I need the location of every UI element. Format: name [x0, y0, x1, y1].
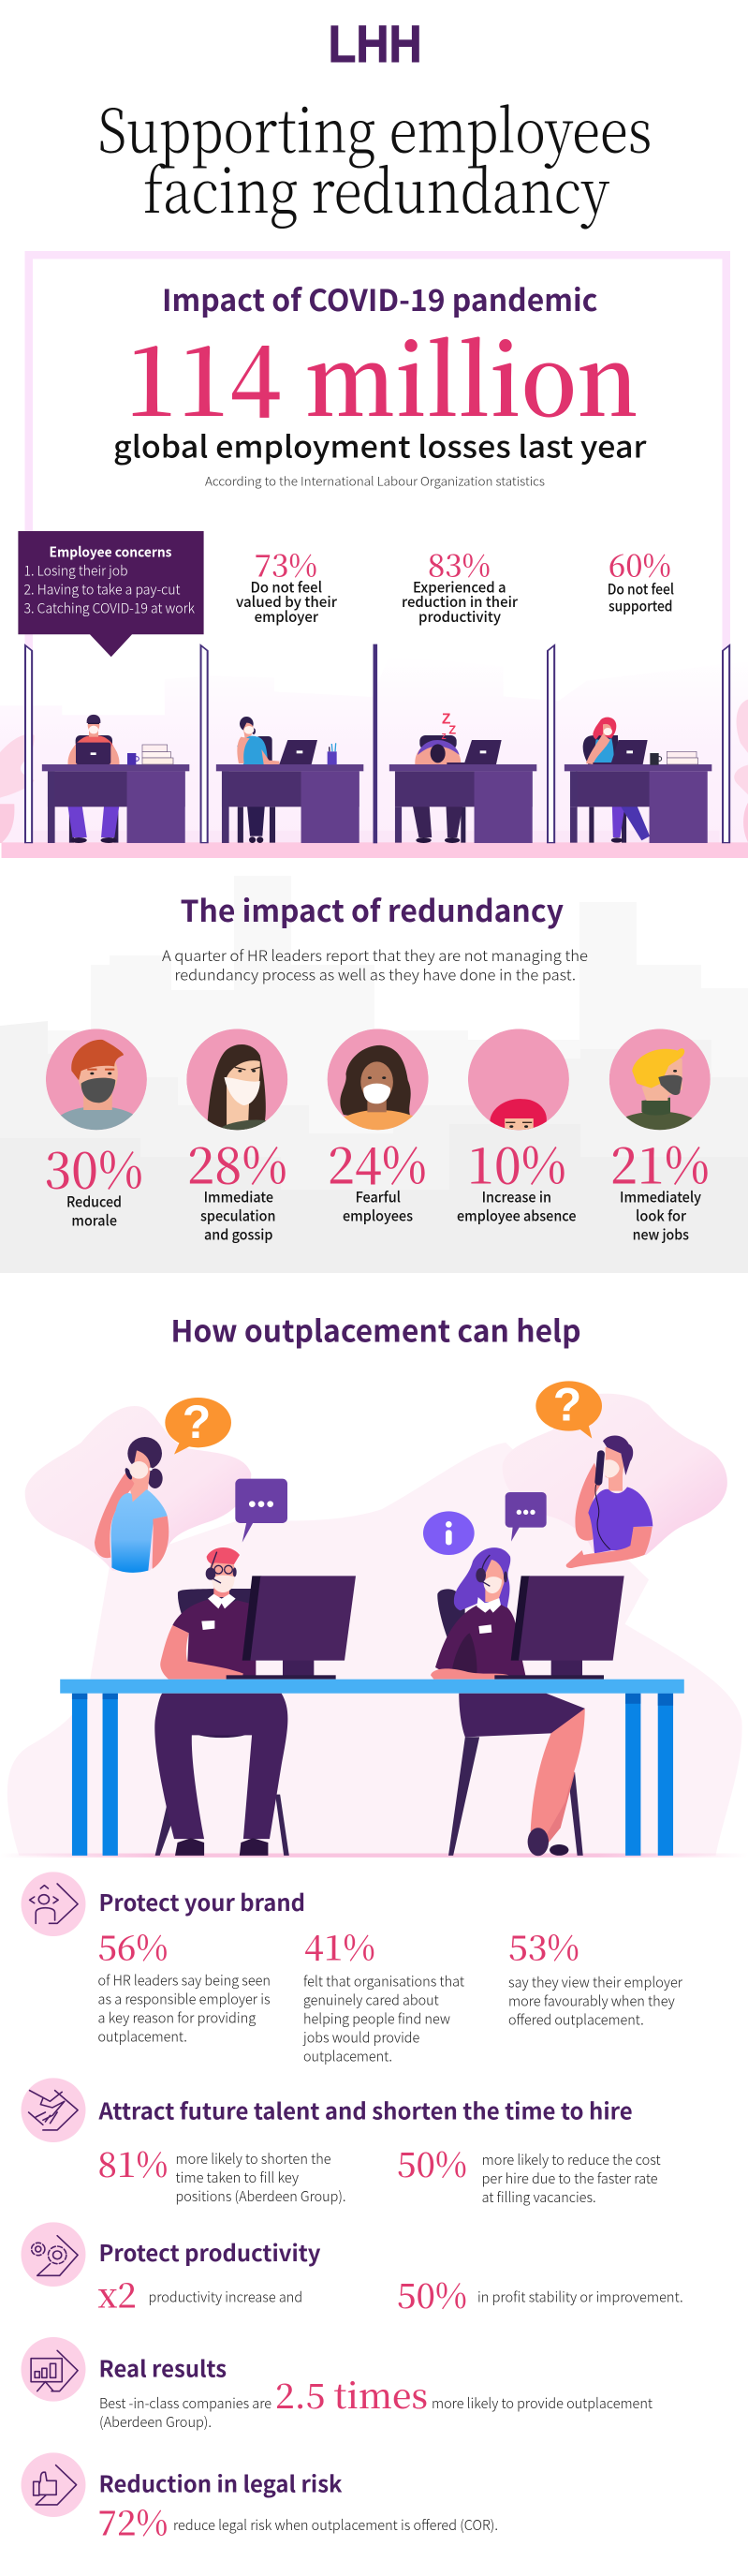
- stat: 41%: helping people find new: [303, 2008, 450, 2028]
- stat: 41%: genuinely cared about: [303, 1990, 439, 2009]
- monitor 2: [494, 1576, 624, 1680]
- stat: 10% absence: 10%: [467, 1126, 566, 1198]
- stat: 50%: at filling vacancies.: [482, 2187, 596, 2207]
- stat: 21% new jobs: 21%: [610, 1126, 710, 1198]
- source note: According to the International Labour Organization statistics: [205, 472, 545, 490]
- background: grey skyline: [0, 876, 748, 1273]
- desk 2: [216, 764, 363, 843]
- sentence with 2.5 times: more likely to provide outplacement: [432, 2393, 653, 2413]
- stat: 30% reduced morale: morale: [71, 1209, 117, 1230]
- icon: thumbs up: [21, 2452, 86, 2517]
- stat: 41%: outplacement.: [303, 2047, 392, 2066]
- stat: x2: x2: [97, 2267, 137, 2317]
- caller 2 blob: [503, 1394, 727, 1555]
- stat: 41%: felt that organisations that: [303, 1971, 465, 1991]
- stat: 83%: 83%: [428, 542, 491, 586]
- agent 2 legs and chair: [448, 1694, 585, 1856]
- callout: employee concerns: 1. Losing their job: [24, 561, 127, 581]
- bubble: info icon: [423, 1511, 475, 1555]
- person 2: woman resting head on hand: [237, 717, 337, 764]
- desk 4: [565, 764, 711, 843]
- stat: 21% new jobs: look for: [636, 1205, 687, 1225]
- stat: 50% profit: 50%: [397, 2268, 467, 2318]
- title: facing redundancy: [143, 144, 609, 230]
- stat: 50% profit: in profit stability or improvement.: [477, 2287, 683, 2307]
- stat: 28% speculation: [187, 1126, 287, 1244]
- right half: caller and agent: [423, 1379, 727, 1680]
- floor: [2, 842, 748, 858]
- stat: 53%: 53%: [508, 1919, 579, 1970]
- stat: 21% new jobs: [610, 1126, 710, 1244]
- caller 2: man on phone: [566, 1435, 653, 1568]
- stat: 60%: 60%: [609, 542, 671, 586]
- stat: x2: productivity increase and: [148, 2287, 302, 2307]
- stat: 60%: [608, 542, 674, 616]
- heading: The impact of redundancy: [181, 888, 564, 931]
- people at desks, right pair: [415, 711, 698, 765]
- bubble: orange question mark 2: [535, 1379, 602, 1439]
- person 4: woman with red hair: [583, 718, 698, 765]
- people at desks, left pair: [68, 715, 337, 765]
- stat: 30% reduced morale: Reduced: [66, 1191, 122, 1211]
- icon: chart presentation: [21, 2337, 86, 2402]
- block: real results: [21, 2337, 653, 2432]
- stat: 41%: [302, 1919, 465, 2066]
- face 1: red hair, grey mask: [46, 1029, 147, 1132]
- bubble: purple chat 2: [506, 1492, 547, 1542]
- stat: 50%: more likely to reduce the cost: [482, 2150, 661, 2169]
- block: reduction in legal risk: [21, 2452, 498, 2546]
- sentence with 2.5 times: (Aberdeen Group).: [99, 2412, 212, 2432]
- stat: 10% absence: employee absence: [457, 1205, 577, 1225]
- stat: 73%: Do not feel: [251, 576, 322, 597]
- stat: 83%: Experienced a: [413, 576, 506, 597]
- stat: 50%: 50%: [397, 2137, 467, 2187]
- agent 2: woman with headset: [431, 1547, 526, 1680]
- person 3: asleep on the desk: [415, 711, 502, 764]
- illustration: call centre scene: [0, 1379, 748, 1858]
- cubicle panels: [25, 644, 729, 843]
- plant left: [0, 734, 35, 843]
- heading: Real results: [99, 2350, 227, 2383]
- stat: 28% speculation: 28%: [187, 1126, 287, 1198]
- stat: 56%: [97, 1919, 271, 2046]
- face 5: blond hair, grey mask, profile: [609, 1029, 711, 1132]
- stat: 81%: positions (Aberdeen Group).: [176, 2186, 346, 2206]
- block: attract future talent: [21, 2078, 661, 2207]
- bubble: orange question mark 2: ?: [553, 1379, 581, 1431]
- stat: 30% reduced morale: [44, 1131, 143, 1230]
- stat: 41%: 41%: [304, 1919, 375, 1970]
- bubble: purple chat 1: [235, 1479, 287, 1543]
- table: [60, 1680, 684, 1856]
- big number: 114 million: 114 million: [125, 303, 638, 444]
- monitor 1: [227, 1576, 356, 1680]
- left half: caller and agent: [25, 1396, 356, 1680]
- logo: LHH: LHH: [329, 14, 422, 73]
- stat: 60%: supported: [609, 596, 672, 616]
- heading: how outplacement can help: How outplacement can help: [170, 1308, 581, 1351]
- desk 3: [389, 764, 536, 843]
- stat: 73%: valued by their: [236, 591, 338, 612]
- stat: 81%: time taken to fill key: [176, 2168, 300, 2187]
- illustration: office desks scene: [0, 644, 748, 858]
- stat: 10% absence: [457, 1126, 577, 1225]
- icon: handshake: [21, 2078, 86, 2142]
- block: protect productivity: [21, 2222, 683, 2318]
- desk 1: [42, 764, 189, 843]
- stat: 30% reduced morale: 30%: [44, 1131, 143, 1203]
- sentence with 2.5 times: Best -in-class companies are: [99, 2393, 271, 2413]
- stat: 56%: of HR leaders say being seen: [97, 1970, 271, 1990]
- face 2: long dark hair, white mask: [186, 1029, 287, 1132]
- icon: brand person: [21, 1872, 86, 1936]
- person 3: asleep on the desk: Z: [448, 723, 456, 736]
- stat: 83%: [402, 542, 519, 627]
- face 4: peeking person: [468, 1029, 569, 1132]
- stat: 56%: outplacement.: [97, 2026, 187, 2046]
- person 1: masked man with laptop, mug and books: [68, 715, 173, 765]
- caller 1: woman on phone: [95, 1437, 169, 1573]
- callout: employee concerns: [18, 531, 204, 657]
- stat: 81%: [97, 2137, 346, 2206]
- panel: impact frame: [24, 251, 730, 656]
- intro text: A quarter of HR leaders report that they are not managing the: [162, 943, 588, 966]
- stat: 53%: [508, 1919, 683, 2029]
- stat: 72%: 72%: [97, 2495, 169, 2546]
- stat: 72%: [97, 2495, 498, 2546]
- stat: 73%: [236, 542, 338, 627]
- stat: 73%: 73%: [255, 542, 317, 586]
- callout: employee concerns: Employee concerns: [49, 541, 172, 561]
- heading: Reduction in legal risk: [99, 2466, 343, 2499]
- stat: 41%: jobs would provide: [302, 2027, 419, 2047]
- stat: 24% fearful: 24%: [328, 1126, 427, 1198]
- agent 1: man with headset: [160, 1547, 256, 1680]
- sentence with 2.5 times: 2.5 times: [275, 2368, 428, 2419]
- stat: 73%: employer: [255, 606, 319, 627]
- block: protect your brand: [21, 1872, 683, 2066]
- bubble: orange question mark 1: [165, 1396, 231, 1455]
- stat: 53%: offered outplacement.: [508, 2009, 644, 2029]
- stat: 56%: a key reason for providing: [97, 2007, 256, 2027]
- background skyline: [0, 656, 748, 842]
- stat: 50%: [397, 2137, 661, 2207]
- stat: 28% speculation: speculation: [200, 1205, 275, 1225]
- stat: 28% speculation: Immediate: [204, 1186, 273, 1207]
- stat: 50% profit: [397, 2268, 683, 2318]
- icon: gears: [21, 2222, 86, 2287]
- stat: 83%: reduction in their: [402, 591, 519, 612]
- stat: 56%: as a responsible employer is: [97, 1989, 271, 2008]
- person 3: asleep on the desk: Z: [442, 711, 450, 727]
- heading: Protect productivity: [99, 2235, 321, 2268]
- stat: x2: [97, 2267, 302, 2317]
- face 3: curly hair, white mask: [328, 1029, 429, 1132]
- stat: 53%: more favourably when they: [508, 1991, 675, 2010]
- heading: Protect your brand: [99, 1885, 305, 1917]
- stat: 53%: say they view their employer: [508, 1972, 683, 1991]
- stat: 50%: per hire due to the faster rate: [482, 2169, 658, 2188]
- faces row: [46, 1029, 711, 1132]
- person legs and chair bases: [67, 806, 650, 843]
- bubble: orange question mark 1: ?: [183, 1396, 211, 1448]
- heading: Attract future talent and shorten the time to hire: [98, 2094, 633, 2126]
- stat: 81%: more likely to shorten the: [176, 2149, 331, 2169]
- title: Supporting employees: [97, 84, 652, 170]
- stat: 72%: reduce legal risk when outplacement is offered (COR).: [173, 2515, 498, 2535]
- background blob and floor: [0, 1443, 748, 1858]
- callout: employee concerns: 3. Catching COVID-19 at work: [24, 599, 195, 618]
- stat: 10% absence: Increase in: [482, 1186, 551, 1207]
- stat: 24% fearful: employees: [343, 1205, 413, 1225]
- stat: 81%: 81%: [97, 2137, 169, 2187]
- stat: 28% speculation: and gossip: [204, 1223, 273, 1244]
- title: [97, 84, 652, 230]
- person 3: asleep on the desk: Z: [442, 733, 447, 741]
- sentence with 2.5 times: [99, 2368, 653, 2432]
- stat: 24% fearful: Fearful: [356, 1186, 401, 1207]
- stat: 56%: 56%: [97, 1919, 169, 1970]
- stat: 21% new jobs: Immediately: [620, 1186, 702, 1207]
- section: the impact of redundancy: [0, 876, 748, 1273]
- stat: 21% new jobs: new jobs: [633, 1223, 689, 1244]
- callout: employee concerns: 2. Having to take a pay-cut: [24, 580, 180, 600]
- subheading: global employment losses: global employment losses last year: [113, 424, 647, 467]
- caller 1 blob: [25, 1406, 251, 1571]
- heading: impact of COVID-19 pandemic: Impact of COVID-19 pandemic: [162, 277, 597, 320]
- plant right: [734, 700, 748, 842]
- section: the impact of redundancy: redundancy process as well as they have done in the past.: [174, 962, 576, 985]
- agent 1 legs and chair: [154, 1694, 289, 1856]
- stat: 60%: Do not feel: [608, 578, 674, 599]
- stat: 83%: productivity: [418, 606, 502, 627]
